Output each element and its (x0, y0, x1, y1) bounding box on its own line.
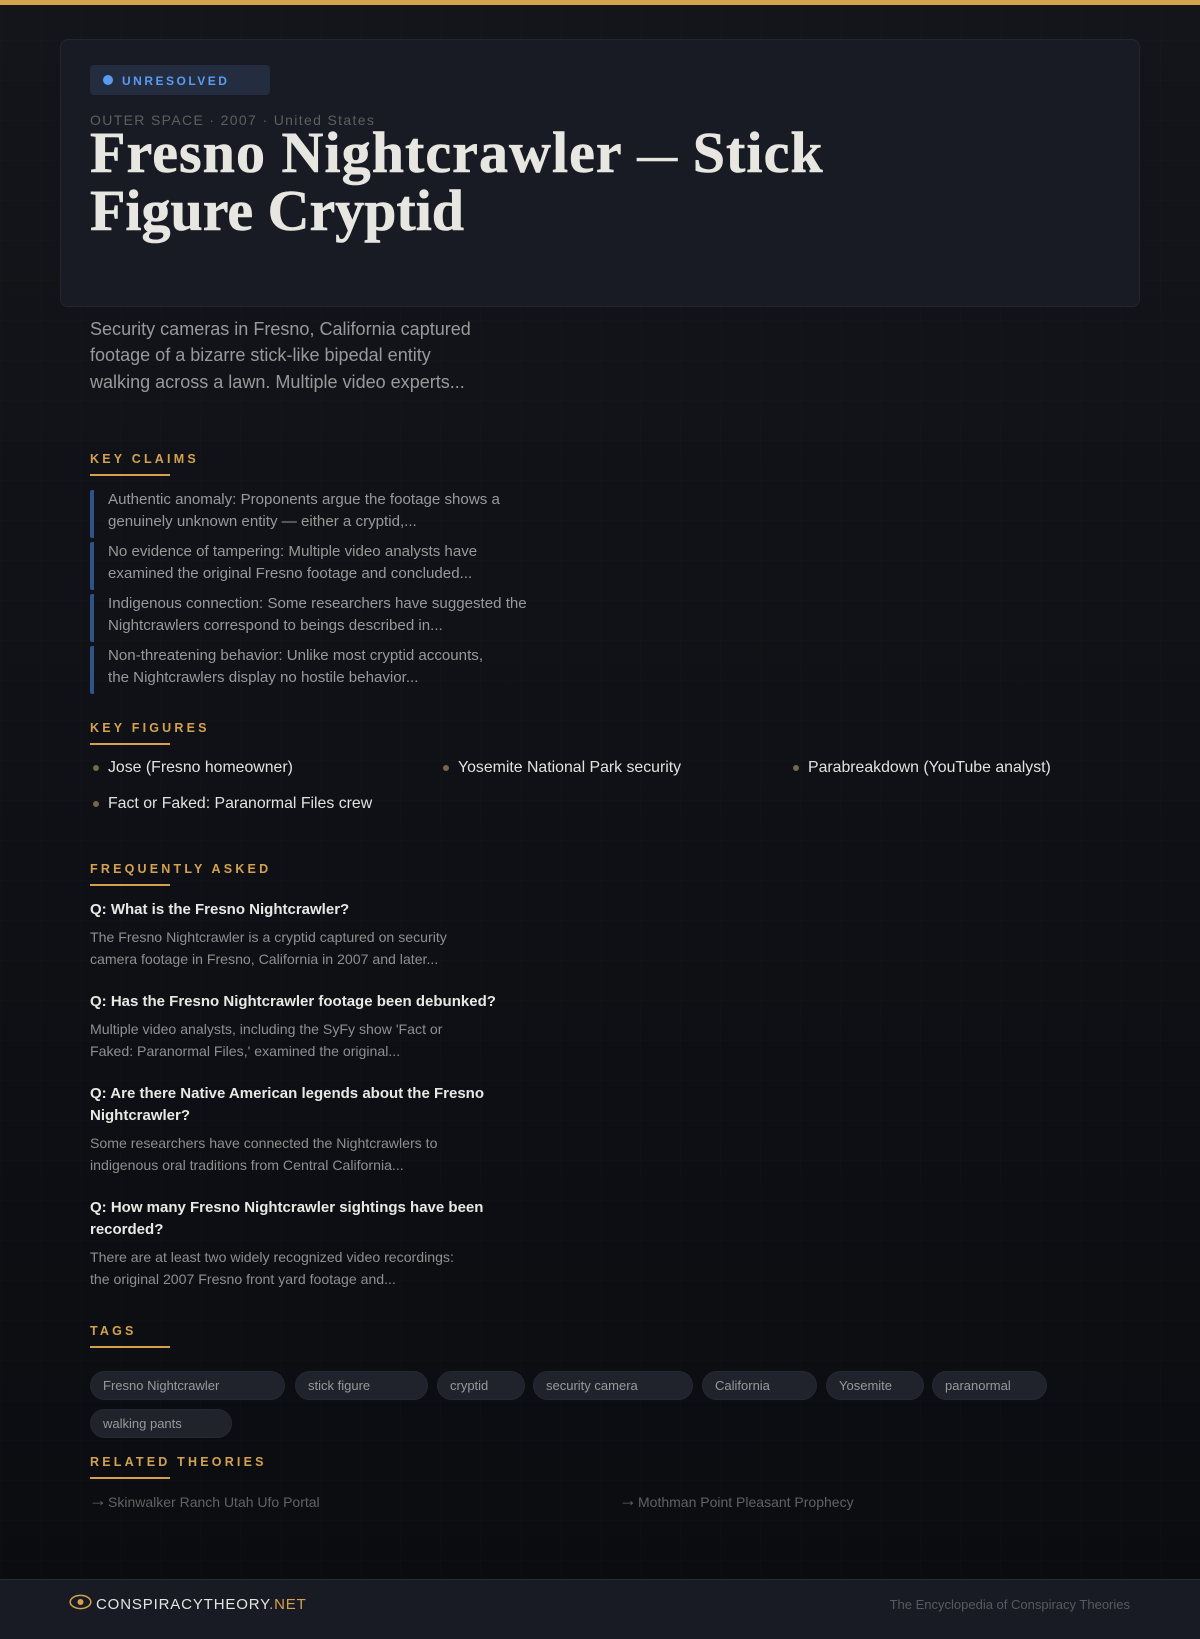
summary text (90, 319, 471, 392)
summary text: footage of a bizarre stick-like bipedal entity (90, 345, 431, 365)
question 3: Q: Are there Native American legends about the Fresno (90, 1085, 484, 1102)
heading: frequently asked: FREQUENTLY ASKED (90, 862, 271, 876)
related link 1: → (89, 1490, 107, 1510)
related link 1: Skinwalker Ranch Utah Ufo Portal (108, 1494, 320, 1510)
footer (0, 1579, 1200, 1639)
question 3: Nightcrawler? (90, 1107, 190, 1124)
claim 3 (90, 594, 570, 642)
status badge (90, 65, 270, 95)
related link 2: Mothman Point Pleasant Prophecy (638, 1494, 854, 1510)
panel: hero header (60, 39, 1140, 307)
tag: stick figure (295, 1371, 428, 1400)
answer 4: the original 2007 Fresno front yard footage and... (90, 1271, 396, 1287)
answer 1: The Fresno Nightcrawler is a cryptid captured on security (90, 929, 447, 945)
figure 3: Parabreakdown (YouTube analyst) (808, 759, 1051, 776)
claim 2: examined the original Fresno footage and concluded... (108, 565, 472, 582)
figure 2: Yosemite National Park security (458, 759, 681, 776)
tag: California: California (715, 1378, 770, 1393)
footer tagline: The Encyclopedia of Conspiracy Theories (890, 1597, 1130, 1612)
question 4: Q: How many Fresno Nightcrawler sightings have been (90, 1199, 483, 1216)
title (90, 120, 824, 244)
answer 2: Faked: Paranormal Files,' examined the original... (90, 1043, 400, 1059)
tag: Fresno Nightcrawler (90, 1371, 285, 1400)
answer 1 (90, 929, 447, 967)
answer 3: indigenous oral traditions from Central California... (90, 1157, 404, 1173)
figure 4: Fact or Faked: Paranormal Files crew (108, 795, 372, 812)
heading: key claims: KEY CLAIMS (90, 452, 199, 466)
answer 2 (90, 1021, 442, 1059)
tag: Fresno Nightcrawler: Fresno Nightcrawler (103, 1378, 219, 1393)
tag: security camera: security camera (546, 1378, 638, 1393)
answer 4 (90, 1249, 454, 1287)
tag: paranormal: paranormal (945, 1378, 1011, 1393)
meta line: OUTER SPACE · 2007 · United States (90, 112, 375, 128)
claim 1 (90, 490, 570, 538)
tag: stick figure: stick figure (308, 1378, 370, 1393)
question 3 (90, 1085, 484, 1124)
heading: tags: TAGS (90, 1324, 137, 1338)
claim 3: Indigenous connection: Some researchers have suggested the (108, 595, 527, 612)
question 4: recorded? (90, 1221, 163, 1238)
claim 4: Non-threatening behavior: Unlike most cryptid accounts, (108, 647, 483, 664)
claim 1: Authentic anomaly: Proponents argue the footage shows a (108, 491, 500, 508)
tag: cryptid (437, 1371, 525, 1400)
tag: California (702, 1371, 817, 1400)
icon: status dot (103, 75, 113, 85)
claim 2: No evidence of tampering: Multiple video analysts have (108, 543, 477, 560)
question 4 (90, 1199, 483, 1238)
top accent bar (0, 0, 1200, 5)
heading: key figures: KEY FIGURES (90, 721, 210, 735)
tag: paranormal (932, 1371, 1047, 1400)
answer 3: Some researchers have connected the Nightcrawlers to (90, 1135, 437, 1151)
related link 2: → (619, 1490, 637, 1510)
tag: Yosemite: Yosemite (839, 1378, 892, 1393)
tag: walking pants (90, 1409, 232, 1438)
heading: related theories: RELATED THEORIES (90, 1455, 267, 1469)
answer 4: There are at least two widely recognized video recordings: (90, 1249, 454, 1265)
question 2: Q: Has the Fresno Nightcrawler footage been debunked? (90, 993, 496, 1010)
tag: cryptid: cryptid (450, 1378, 488, 1393)
answer 3 (90, 1135, 437, 1173)
badge label: UNRESOLVED (122, 74, 229, 88)
figure 1: Jose (Fresno homeowner) (108, 759, 293, 776)
tag: security camera (533, 1371, 693, 1400)
claim 1: genuinely unknown entity — either a cryptid,... (108, 513, 417, 530)
question 1: Q: What is the Fresno Nightcrawler? (90, 901, 349, 918)
claim 4 (90, 646, 570, 694)
title: Figure Cryptid (90, 178, 464, 243)
tag: Yosemite (826, 1371, 924, 1400)
claim 3: Nightcrawlers correspond to beings described in... (108, 617, 443, 634)
answer 2: Multiple video analysts, including the SyFy show 'Fact or (90, 1021, 442, 1037)
logo wordmark: CONSPIRACYTHEORY.NET (96, 1596, 307, 1613)
claim 2 (90, 542, 570, 590)
claim 4: the Nightcrawlers display no hostile behavior... (108, 669, 418, 686)
summary text: walking across a lawn. Multiple video experts... (90, 372, 465, 392)
icon: eye logo (70, 1594, 92, 1610)
summary text: Security cameras in Fresno, California captured (90, 319, 471, 339)
tag: walking pants: walking pants (103, 1416, 182, 1431)
title: Fresno Nightcrawler — Stick (90, 120, 824, 185)
answer 1: camera footage in Fresno, California in 2007 and later... (90, 951, 438, 967)
